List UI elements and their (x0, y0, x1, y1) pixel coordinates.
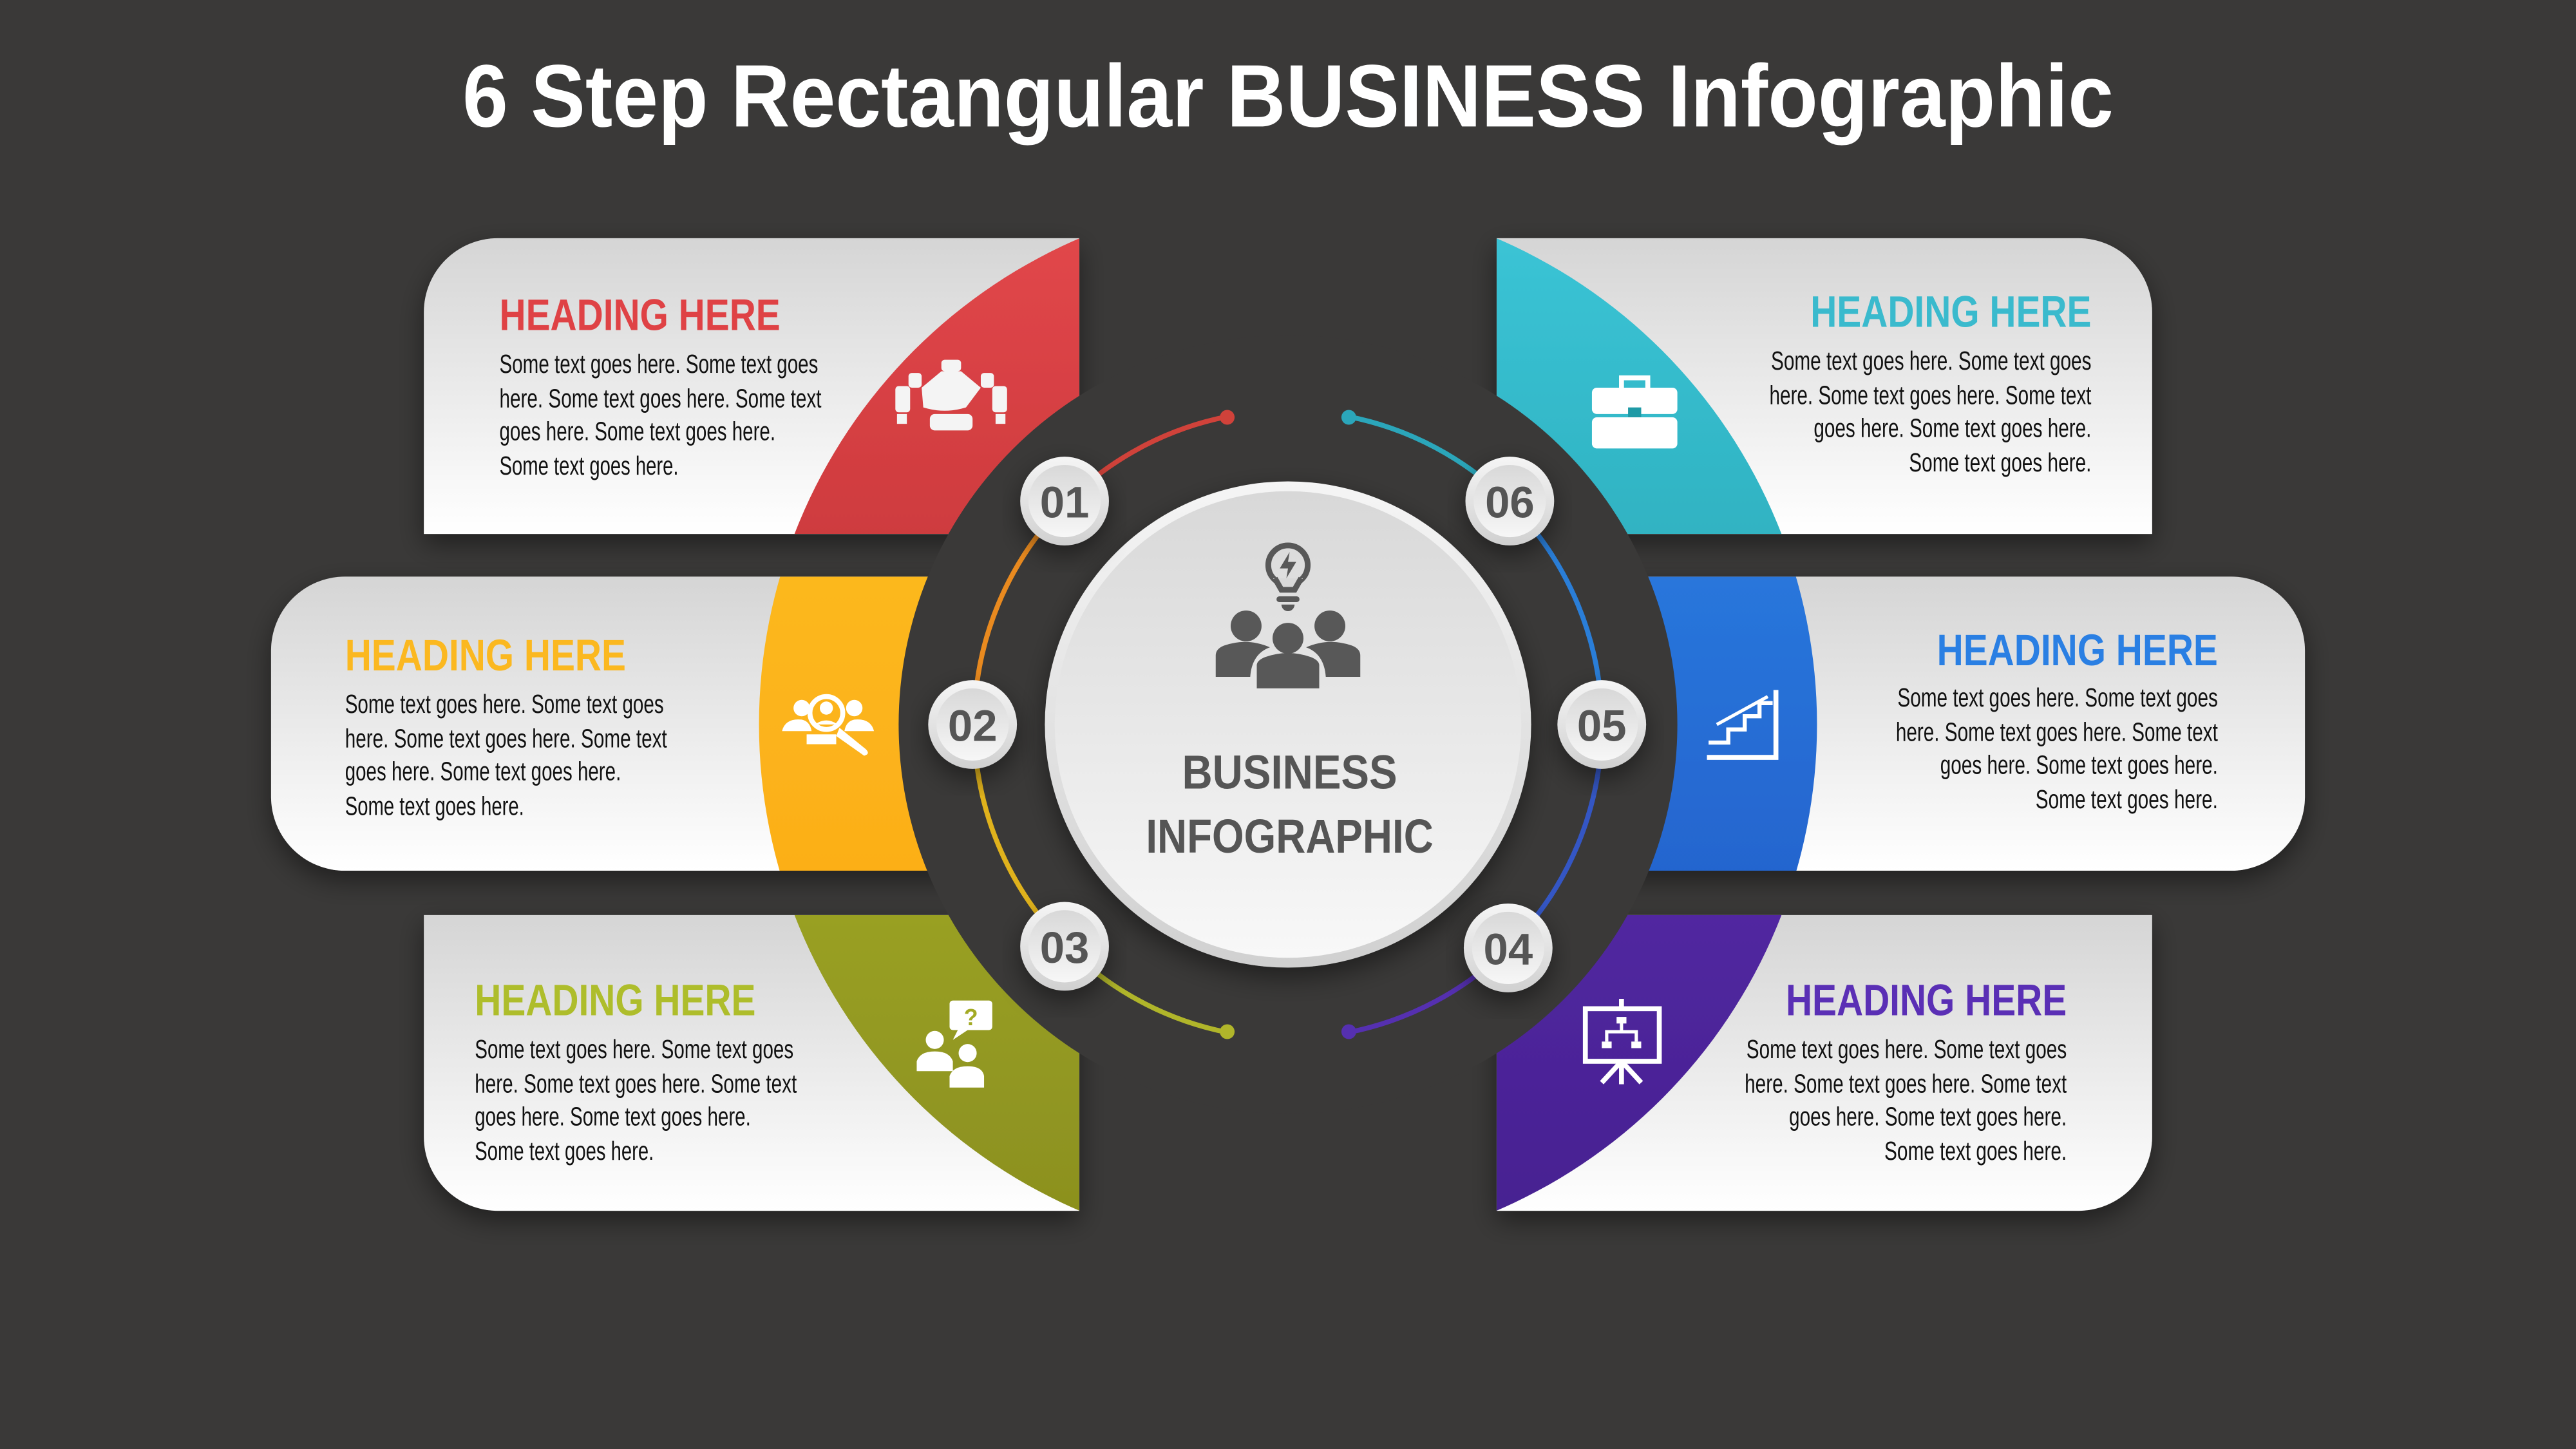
icon: bulb with people (1216, 545, 1360, 688)
text block 4: Some text goes here. Some text goes (1747, 1034, 2067, 1064)
badge 05: 05 (1577, 701, 1627, 751)
text block 1: Some text goes here. (500, 451, 679, 480)
text block 5: Some text goes here. (2036, 784, 2218, 814)
badge 06 (1466, 457, 1554, 545)
text block 2 (345, 630, 667, 820)
icon: person with question (916, 1001, 992, 1088)
text block 2: here. Some text goes here. Some text (345, 724, 667, 753)
text block 1: here. Some text goes here. Some text (500, 384, 822, 413)
text block 2: HEADING HERE (345, 630, 626, 680)
badge 05 (1557, 680, 1646, 769)
text block 1: Some text goes here. Some text goes (500, 349, 818, 379)
text block 6: Some text goes here. (1909, 448, 2091, 477)
panel 5: middle right (1642, 576, 2311, 886)
text block 5: Some text goes here. Some text goes (1897, 683, 2218, 712)
badge 03: 03 (1040, 923, 1089, 972)
text block 5: here. Some text goes here. Some text (1896, 717, 2218, 747)
text block 3: here. Some text goes here. Some text (475, 1068, 797, 1098)
ring arcs (974, 410, 1602, 1039)
text block 3: goes here. Some text goes here. (475, 1101, 751, 1131)
badge 01: 01 (1040, 478, 1089, 527)
badge 06: 06 (1485, 478, 1535, 527)
center circle (1045, 481, 1531, 968)
text block 5: goes here. Some text goes here. (1940, 750, 2218, 780)
badge 04 (1464, 904, 1553, 992)
text block 3: Some text goes here. Some text goes (475, 1034, 793, 1064)
text block 6 (1769, 287, 2092, 477)
badge 01 (1020, 457, 1109, 545)
badge 03 (1020, 902, 1109, 990)
icon: person with question: ? (964, 1005, 978, 1030)
text block 6: HEADING HERE (1810, 287, 2091, 337)
text block 3: HEADING HERE (475, 976, 755, 1025)
icon: presentation board (1586, 999, 1660, 1084)
center circle: INFOGRAPHIC (1146, 810, 1434, 863)
text block 2: Some text goes here. (345, 791, 524, 820)
text block 1: HEADING HERE (500, 290, 781, 340)
text block 4: HEADING HERE (1786, 976, 2067, 1025)
badge 04: 04 (1484, 924, 1533, 974)
center label: BUSINESS (1182, 745, 1397, 799)
text block 2: Some text goes here. Some text goes (345, 689, 664, 719)
panel 6: top right (1491, 238, 2158, 550)
text block 4: goes here. Some text goes here. (1789, 1101, 2067, 1131)
text block 3 (475, 976, 797, 1166)
title: 6 Step Rectangular BUSINESS Infographic (462, 46, 2114, 146)
text block 3: Some text goes here. (475, 1136, 654, 1166)
text block 6: Some text goes here. Some text goes (1771, 346, 2091, 375)
text block 1 (500, 290, 822, 480)
icon: briefcase (1592, 378, 1678, 448)
text block 6: here. Some text goes here. Some text (1769, 381, 2092, 410)
text block 4: Some text goes here. (1884, 1136, 2067, 1166)
text block 5 (1896, 625, 2218, 814)
badge 02: 02 (948, 701, 998, 751)
panel 1: top left (418, 238, 1085, 550)
text block 5: HEADING HERE (1937, 625, 2218, 675)
text block 4 (1745, 976, 2067, 1166)
icon: stairs chart (1707, 690, 1776, 757)
icon: conference table (895, 360, 1007, 430)
panel 4: bottom right (1491, 914, 2158, 1226)
panel 3: bottom left (418, 914, 1085, 1226)
text block 2: goes here. Some text goes here. (345, 757, 621, 786)
icon: people search (782, 697, 874, 755)
text block 4: here. Some text goes here. Some text (1745, 1068, 2067, 1098)
text block 6: goes here. Some text goes here. (1814, 413, 2091, 443)
text block 1: goes here. Some text goes here. (500, 417, 775, 446)
badge 02 (928, 680, 1017, 769)
panel 2: middle left (265, 576, 934, 886)
